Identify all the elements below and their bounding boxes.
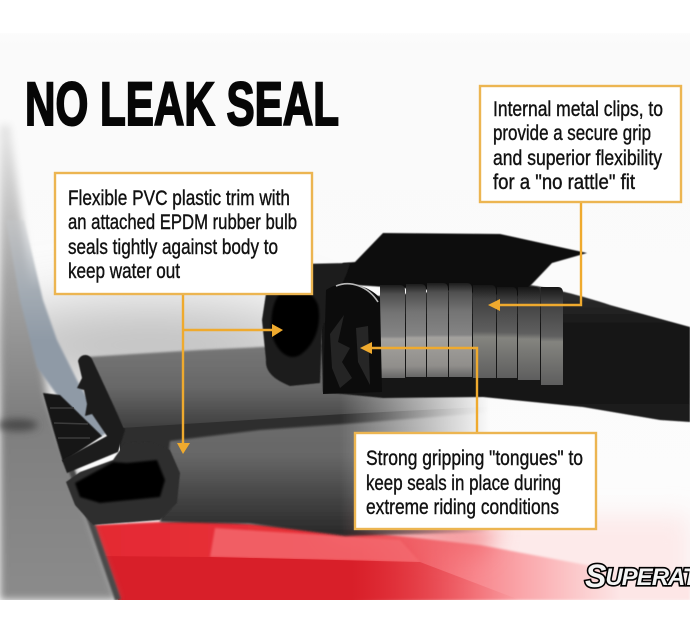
cutaway seal: metal clips bbox=[380, 283, 563, 385]
cutaway seal: black body bbox=[320, 233, 690, 422]
cutaway seal: bulb bbox=[262, 263, 350, 386]
foreground seal end with trim lip and bulb bbox=[43, 355, 180, 525]
callout: gripping tongues: extreme riding conditions bbox=[366, 495, 559, 519]
left pillar and grey tube bbox=[0, 125, 118, 600]
callout: PVC trim: keep water out bbox=[68, 259, 180, 283]
red vehicle body panel bbox=[92, 505, 690, 600]
callout: PVC trim: Flexible PVC plastic trim with bbox=[68, 186, 290, 210]
callout: PVC trim bbox=[55, 173, 312, 294]
callout: PVC trim: an attached EPDM rubber bulb bbox=[68, 210, 297, 234]
callout: gripping tongues: Strong gripping "tongues" to bbox=[366, 446, 583, 470]
callout: metal clips bbox=[480, 86, 681, 202]
callout: metal clips: provide a secure grip bbox=[493, 121, 651, 145]
bottom white margin bbox=[0, 600, 690, 632]
cutaway seal: gripping tongues bbox=[323, 284, 382, 394]
title: NO LEAK SEAL bbox=[25, 70, 339, 138]
rubber seal strips, background bbox=[88, 344, 484, 538]
callout: gripping tongues bbox=[355, 433, 596, 529]
arrow: metal clips bbox=[488, 203, 581, 311]
callout: metal clips: for a "no rattle" fit bbox=[493, 170, 635, 194]
arrow: gripping tongues bbox=[360, 342, 477, 433]
brand logo: S bbox=[585, 558, 607, 594]
callout: PVC trim: seals tightly against body to bbox=[68, 235, 278, 259]
brand logo bbox=[585, 558, 690, 594]
callout: gripping tongues: keep seals in place during bbox=[366, 471, 561, 495]
arrow: bulb callout to seals bbox=[177, 295, 283, 454]
